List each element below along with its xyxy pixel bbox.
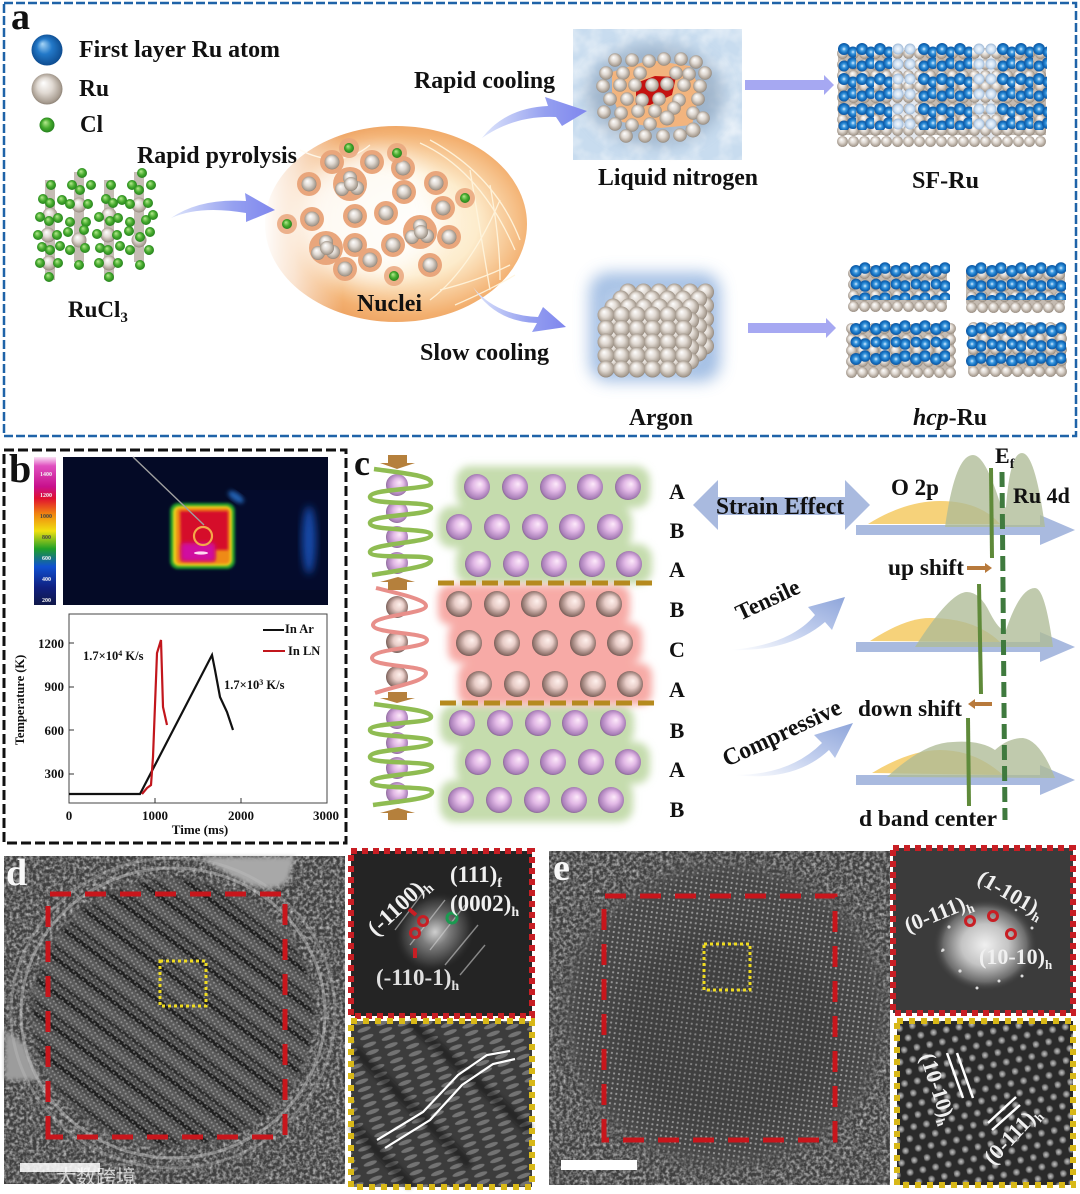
compressive label: Compressive <box>719 695 846 772</box>
rate annotations: K/s <box>122 649 144 663</box>
RuCl3 label: RuCl <box>68 297 120 322</box>
legend: First layer Ru atom <box>79 37 280 63</box>
stacking labels: A <box>669 757 685 782</box>
tensile label: Tensile <box>732 574 804 626</box>
temperature chart: K/s <box>263 678 285 692</box>
panel e letter: e <box>553 847 570 889</box>
argon label: Argon <box>629 405 693 431</box>
hcp-Ru models <box>846 262 1067 378</box>
down shift label: down shift <box>858 696 962 721</box>
red curve: in LN <box>142 640 167 794</box>
legend: Ru <box>79 76 109 102</box>
HRTEM inset e: h <box>933 1117 950 1129</box>
x-axis ticks: 0 <box>66 808 72 823</box>
Fermi level dashed line <box>1002 472 1005 820</box>
scale bar <box>561 1160 637 1170</box>
density of states: tensile <box>856 588 1075 662</box>
stacking labels: A <box>669 479 685 504</box>
Fermi level label: f <box>1010 457 1015 472</box>
rate annotations: 1.7×10 <box>83 649 118 663</box>
legend <box>32 34 280 138</box>
panel e: TEM of hcp-Ru <box>549 847 1073 1185</box>
argon cube <box>590 273 720 381</box>
arrow: to SF-Ru <box>745 75 834 95</box>
density of states: compressive <box>856 738 1075 795</box>
stacking labels: B <box>670 518 685 543</box>
up shift label: up shift <box>888 555 964 580</box>
FFT e: (10-10) <box>979 944 1045 969</box>
SF-Ru model <box>837 42 1047 147</box>
liquid nitrogen image <box>573 29 742 160</box>
O 2p label: O 2p <box>891 475 939 500</box>
up shift arrow <box>967 563 992 573</box>
legend: Cl <box>80 112 103 138</box>
stacking labels: A <box>669 677 685 702</box>
FFT e: h <box>1045 957 1053 972</box>
FFT d <box>351 851 532 1016</box>
colour scale: 1200 <box>40 493 52 499</box>
yellow selection box <box>160 961 206 1006</box>
d band center lines <box>968 468 992 806</box>
y-axis ticks: 300 <box>44 766 64 781</box>
legend: In LN <box>288 644 320 658</box>
atom layers <box>438 466 655 822</box>
y-axis ticks: 900 <box>44 679 64 694</box>
x-axis ticks: 1000 <box>142 808 168 823</box>
rate annotations: 4 <box>118 649 122 658</box>
colour scale: 200 <box>42 598 51 604</box>
liquid nitrogen label: Liquid nitrogen <box>598 165 758 191</box>
yellow selection box <box>704 944 750 990</box>
TEM micrograph e <box>549 851 890 1185</box>
panel a border <box>4 3 1076 436</box>
stacking labels: B <box>670 718 685 743</box>
scale bar d <box>20 1163 100 1172</box>
FFT e: (0-111) <box>901 891 969 938</box>
hcp-Ru label: hcp-Ru <box>913 405 987 431</box>
RuCl3 label: 3 <box>120 310 128 326</box>
panel b border <box>4 450 346 843</box>
nuclei sphere <box>262 124 532 324</box>
SF-Ru label: SF-Ru <box>912 168 979 194</box>
strain effect label: Strain Effect <box>716 494 844 520</box>
FFT d: (111) <box>450 862 497 887</box>
rapid cooling label: Rapid cooling <box>414 68 555 94</box>
stacking labels: C <box>669 637 685 662</box>
black curve: in Ar <box>69 655 233 794</box>
x-axis title: Time (ms) <box>172 822 228 837</box>
FFT d: f <box>497 876 502 891</box>
down shift arrow <box>968 699 992 709</box>
colour scale: 400 <box>42 577 51 583</box>
d band center label: d band center <box>859 806 997 831</box>
colour scale: 1000 <box>40 514 52 520</box>
panel c: strain effect <box>354 443 1075 831</box>
FFT e: h <box>964 900 977 917</box>
watermark: 大数跨境 <box>56 1166 136 1189</box>
FFT d: h <box>421 881 438 897</box>
y-axis title: Temperature (K) <box>13 655 27 745</box>
stacking labels: B <box>670 797 685 822</box>
helix column <box>370 455 432 820</box>
rapid pyrolysis label: Rapid pyrolysis <box>137 143 297 169</box>
legend: In Ar <box>285 622 314 636</box>
arrow: to nuclei <box>171 193 275 222</box>
compressive arrow <box>735 723 853 776</box>
FFT d: (-1100) <box>362 876 429 941</box>
x-axis ticks: 3000 <box>313 808 339 823</box>
Ru 4d label: Ru 4d <box>1013 483 1070 508</box>
FFT e: (1-101) <box>974 865 1043 919</box>
panel d letter: d <box>6 852 27 894</box>
FFT e: h <box>1029 909 1044 926</box>
thermal image <box>63 457 328 605</box>
y-axis ticks: 1200 <box>38 636 64 651</box>
colour scale: 600 <box>42 556 51 562</box>
stacking labels: A <box>669 557 685 582</box>
arrow: rapid cooling <box>482 97 587 138</box>
panel b: temperature data <box>4 446 346 843</box>
panel c letter: c <box>354 443 370 483</box>
strain effect arrow <box>693 480 870 530</box>
stacking labels: B <box>670 597 685 622</box>
HRTEM inset e <box>897 1021 1073 1185</box>
panel a: synthesis schematic <box>4 0 1076 436</box>
HRTEM inset e: (0-111) <box>978 1106 1040 1169</box>
y-axis ticks <box>38 636 64 781</box>
temperature chart: 3 <box>259 678 263 687</box>
HRTEM inset d <box>351 1021 532 1187</box>
panel b letter: b <box>9 446 31 491</box>
red selection box <box>604 896 835 1140</box>
HRTEM inset e: (10-10) <box>915 1050 959 1120</box>
stacking labels <box>669 479 685 822</box>
arrow: slow cooling <box>473 287 566 332</box>
slow cooling label: Slow cooling <box>420 340 549 366</box>
colour scale: 1400 <box>40 472 52 478</box>
temperature chart <box>13 614 339 837</box>
colour scale <box>34 457 56 605</box>
FFT d: h <box>511 905 519 920</box>
colour scale: 800 <box>42 535 51 541</box>
TEM micrograph d <box>4 856 345 1184</box>
RuCl3 crystal <box>33 168 158 282</box>
y-axis ticks: 600 <box>44 723 64 738</box>
Fermi level label: E <box>995 443 1010 468</box>
FFT d: (-110-1) <box>376 965 451 990</box>
red selection box <box>48 894 285 1137</box>
HRTEM inset e: h <box>1031 1109 1048 1125</box>
temperature chart: 1.7×10 <box>224 678 259 692</box>
arrow: to hcp-Ru <box>748 318 836 338</box>
FFT d: (0002) <box>450 891 511 916</box>
x-axis ticks: 2000 <box>228 808 254 823</box>
x-axis ticks <box>66 808 339 823</box>
FFT d: h <box>451 979 459 994</box>
FFT e <box>893 848 1073 1013</box>
tensile arrow <box>730 597 845 650</box>
density of states: unstrained <box>856 453 1075 545</box>
panel d: TEM of SF-Ru <box>4 851 532 1189</box>
legend <box>263 622 320 658</box>
nuclei label: Nuclei <box>357 291 422 317</box>
